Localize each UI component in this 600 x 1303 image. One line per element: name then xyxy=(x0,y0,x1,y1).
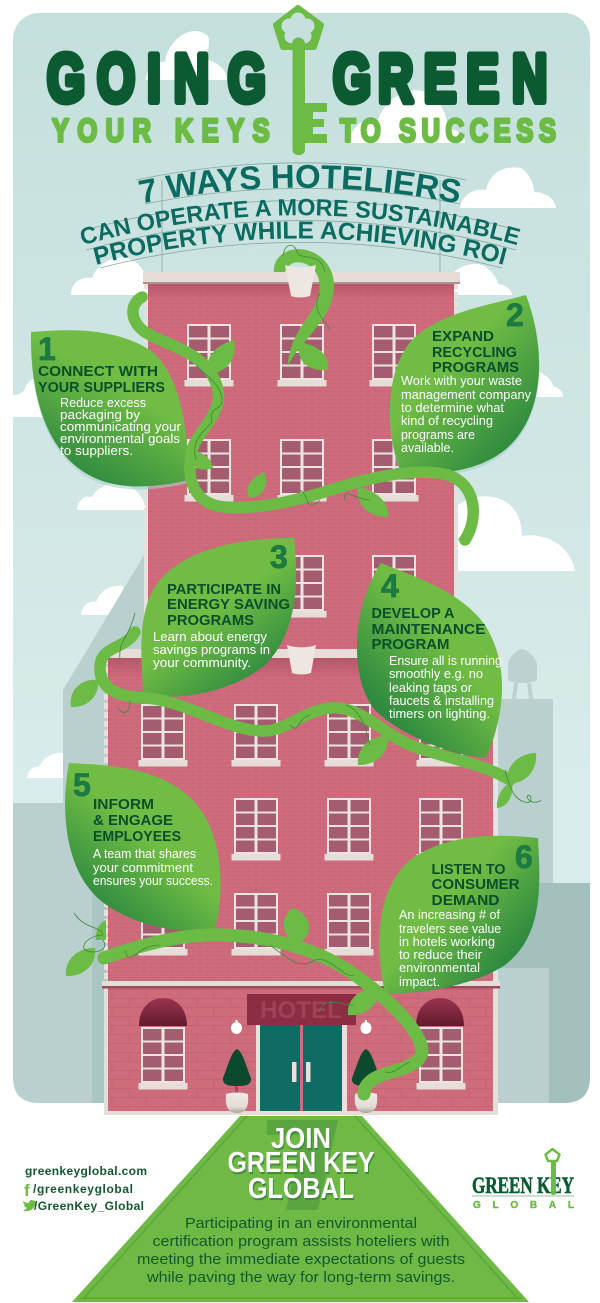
leaf 6: listen to consumer demand: to reduce their xyxy=(399,948,482,962)
logo: green key global xyxy=(472,1149,574,1211)
topiary left xyxy=(223,1049,251,1113)
cta: join green key global: GLOBAL xyxy=(248,1173,354,1205)
leaf 2: expand recycling programs: to determine what xyxy=(401,401,505,415)
leaf 3: participate in energy saving programs xyxy=(141,538,296,696)
middle storey xyxy=(102,649,500,984)
leaf 1: connect with your suppliers: communicating your xyxy=(60,420,181,434)
leaf 5: inform and engage employees: your commitment xyxy=(93,861,194,875)
title: GREEN xyxy=(333,40,547,116)
leaf 3: participate in energy saving programs: PARTICIPATE IN xyxy=(167,582,281,598)
leaf 6: listen to consumer demand: LISTEN TO xyxy=(432,862,506,878)
leaf 2: expand recycling programs: 2 xyxy=(506,297,524,333)
social links: f xyxy=(24,1181,30,1200)
subtitle: 7 ways hoteliers: 7 WAYS HOTELIERS xyxy=(138,164,460,203)
leaf 2: expand recycling programs: available. xyxy=(401,441,454,455)
leaf 2: expand recycling programs xyxy=(390,295,539,476)
hotel sign: HOTEL xyxy=(260,997,342,1024)
leaf 5: inform and engage employees: 5 xyxy=(73,767,91,803)
background clouds xyxy=(13,31,575,778)
leaf 2: expand recycling programs: programs are xyxy=(401,428,475,442)
lamps xyxy=(231,1020,372,1034)
leaf 4: develop a maintenance program: MAINTENANCE xyxy=(372,622,486,638)
leaf 6: listen to consumer demand: impact. xyxy=(399,975,440,989)
leaf 2: expand recycling programs: management company xyxy=(401,388,532,402)
cta: join green key global xyxy=(72,1116,529,1302)
leaf 6: listen to consumer demand: An increasing # of xyxy=(399,908,501,922)
leaf 3: participate in energy saving programs: Learn about energy xyxy=(153,630,268,644)
cta: join green key global: GLOBAL xyxy=(249,1175,355,1207)
topiary right xyxy=(352,1049,380,1113)
leaf 5: inform and engage employees: INFORM xyxy=(93,797,154,813)
leaf 1: connect with your suppliers: 1 xyxy=(38,331,56,367)
logo: green key global: GLOBAL xyxy=(473,1200,574,1211)
leaf 3: participate in energy saving programs: your community. xyxy=(153,656,251,670)
small leaves xyxy=(66,340,536,1015)
cta: join green key global: JOIN xyxy=(272,1125,332,1157)
title: TO SUCCESS xyxy=(340,114,556,149)
subtitle: 7 ways hoteliers xyxy=(80,162,520,272)
leaf 6: listen to consumer demand xyxy=(379,836,539,993)
leaf 5: inform and engage employees: EMPLOYEES xyxy=(93,829,181,845)
leaf 4: develop a maintenance program: 4 xyxy=(381,568,399,604)
subtitle: 7 ways hoteliers: PROPERTY WHILE ACHIEVING ROI xyxy=(93,222,507,264)
cta: join green key global: Participating in an environmental xyxy=(185,1215,417,1232)
leaf 3: participate in energy saving programs: 3 xyxy=(270,539,288,575)
title: GOING xyxy=(47,40,266,116)
leaf 1: connect with your suppliers xyxy=(31,330,188,489)
leaf 4: develop a maintenance program: faucets & installing xyxy=(389,694,494,708)
cta: join green key global: certification program assists hoteliers with xyxy=(152,1233,449,1250)
social links: greenkeyglobal.com xyxy=(25,1164,147,1178)
cta: join green key global: meeting the immediate expectations of guests xyxy=(137,1251,465,1268)
tendrils xyxy=(74,245,541,1073)
keystone: top xyxy=(285,265,316,298)
leaf 4: develop a maintenance program: timers on lighting. xyxy=(389,707,490,721)
title: YOUR KEYS xyxy=(52,114,270,149)
leaf 6: listen to consumer demand: 6 xyxy=(515,839,533,875)
leaf 4: develop a maintenance program: PROGRAM xyxy=(372,637,450,653)
cta: join green key global: GREEN KEY xyxy=(228,1149,376,1181)
ground floor xyxy=(102,981,500,1115)
leaf 5: inform and engage employees: A team that shares xyxy=(93,847,196,861)
leaf 4: develop a maintenance program: DEVELOP A xyxy=(372,606,455,622)
leaf 2: expand recycling programs: kind of recycling xyxy=(401,414,493,428)
vines xyxy=(100,249,510,1094)
social links xyxy=(23,1164,147,1211)
leaf 1: connect with your suppliers: YOUR SUPPLIERS xyxy=(38,380,165,396)
leaf 3: participate in energy saving programs: savings programs in xyxy=(153,643,270,657)
cta: join green key global: while paving the way for long-term savings. xyxy=(146,1269,455,1286)
leaf 6: listen to consumer demand: environmental xyxy=(399,961,480,975)
keystone: middle xyxy=(287,645,316,674)
cta: join green key global: JOIN xyxy=(271,1123,331,1155)
leaf 4: develop a maintenance program: Ensure all is running xyxy=(389,654,502,668)
ghost number seven xyxy=(267,1120,338,1210)
leaf 6: listen to consumer demand: in hotels working xyxy=(399,935,495,949)
leaf 4: develop a maintenance program: leaking taps or xyxy=(389,681,472,695)
leaf 4: develop a maintenance program xyxy=(357,563,502,758)
hotel sign xyxy=(247,994,356,1025)
leaf 1: connect with your suppliers: packaging by xyxy=(60,408,141,422)
leaf 6: listen to consumer demand: CONSUMER xyxy=(432,877,520,893)
upper storey xyxy=(143,272,460,653)
subtitle: 7 ways hoteliers: CAN OPERATE A MORE SUSTAINABLE xyxy=(80,198,520,245)
leaf 6: listen to consumer demand: DEMAND xyxy=(432,893,500,909)
leaf 2: expand recycling programs: RECYCLING xyxy=(432,345,517,361)
social link: twitter: /GreenKey_Global xyxy=(34,1199,144,1213)
icon: key xyxy=(276,8,327,155)
social links: /greenkeyglobal xyxy=(33,1182,133,1196)
leaf 2: expand recycling programs: Work with your waste xyxy=(401,374,522,388)
leaf 1: connect with your suppliers: environmental goals xyxy=(60,432,180,446)
icon: twitter bird xyxy=(23,1200,36,1211)
leaf 5: inform and engage employees xyxy=(65,763,221,931)
leaf 4: develop a maintenance program: smoothly e.g. no xyxy=(389,667,483,681)
leaf 2: expand recycling programs: EXPAND xyxy=(432,329,494,345)
cta: join green key global: GREEN KEY xyxy=(228,1147,374,1179)
leaf 3: participate in energy saving programs: PROGRAMS xyxy=(167,613,254,629)
leaf 3: participate in energy saving programs: ENERGY SAVING xyxy=(167,597,290,613)
leaf 1: connect with your suppliers: CONNECT WITH xyxy=(38,364,158,380)
leaf 5: inform and engage employees: ensures your success. xyxy=(93,874,213,888)
hotel building xyxy=(102,272,500,1115)
title xyxy=(47,40,556,149)
leaf 2: expand recycling programs: PROGRAMS xyxy=(432,360,519,376)
leaf 5: inform and engage employees: & ENGAGE xyxy=(93,813,173,829)
background buildings xyxy=(13,555,590,1103)
leaf 1: connect with your suppliers: to suppliers. xyxy=(60,444,133,458)
leaf 6: listen to consumer demand: travelers see value xyxy=(399,922,501,936)
door xyxy=(256,1025,347,1112)
leaf 1: connect with your suppliers: Reduce excess xyxy=(60,396,146,410)
